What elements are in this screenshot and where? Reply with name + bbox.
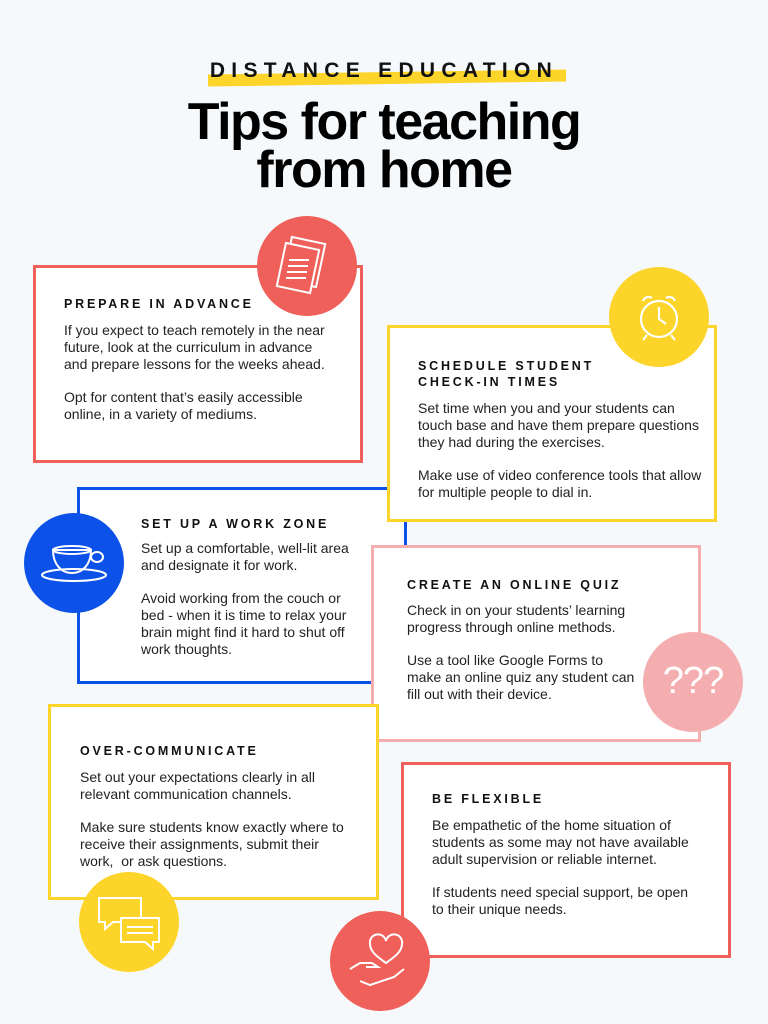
panel: over-communicate: OVER-COMMUNICATE (80, 744, 259, 758)
panel: online quiz: Use a tool like Google Forms to make an online quiz any student can fill out with their device. (407, 652, 634, 702)
panel: be flexible: Be empathetic of the home situation of students as some may not have available adult supervision or reliable internet. (432, 817, 689, 867)
panel: online quiz (371, 545, 701, 742)
icon: question marks: ??? (663, 660, 723, 702)
panel: over-communicate (48, 704, 379, 900)
title: Tips for teaching (188, 93, 580, 151)
panel: work zone: Set up a comfortable, well-lit area and designate it for work. (141, 540, 349, 573)
title: from home (256, 141, 512, 199)
kicker with highlight: DISTANCE EDUCATION (210, 59, 558, 82)
panel: work zone (77, 487, 407, 684)
panel: schedule check-ins (387, 325, 717, 522)
panel: be flexible (401, 762, 731, 958)
icon: question marks (643, 632, 743, 732)
panel: prepare in advance (33, 265, 363, 463)
panel: schedule check-ins: Set time when you and your students can touch base and have them prepare questions they had during the exercises. (418, 400, 699, 450)
icon: documents (257, 216, 357, 316)
header (188, 59, 580, 199)
icon: heart in hand (330, 911, 430, 1011)
icon: chat bubbles (79, 872, 179, 972)
panel: prepare in advance: Opt for content that’s easily accessible online, in a variety of mediums. (64, 389, 303, 422)
icon: alarm clock (609, 267, 709, 367)
panel: be flexible: If students need special support, be open to their unique needs. (432, 884, 688, 917)
panel: over-communicate: Make sure students know exactly where to receive their assignments, submit their work, or ask questions. (80, 819, 344, 869)
panel: over-communicate: Set out your expectations clearly in all relevant communication channels. (80, 769, 315, 802)
panel: be flexible: BE FLEXIBLE (432, 792, 544, 806)
panel: schedule check-ins: CHECK-IN TIMES (418, 375, 560, 389)
panel: online quiz: Check in on your students’ learning progress through online methods. (407, 602, 625, 635)
panel: prepare in advance: PREPARE IN ADVANCE (64, 297, 254, 311)
icon: teacup (24, 513, 124, 613)
panel: work zone: Avoid working from the couch or bed - when it is time to relax your brain might find it hard to shut off work thoughts. (141, 590, 346, 657)
panel: prepare in advance: If you expect to teach remotely in the near future, look at the curriculum in advance and prepare lessons for the weeks ahead. (64, 322, 325, 372)
panel: schedule check-ins: Make use of video conference tools that allow for multiple people to dial in. (418, 467, 701, 500)
panel: schedule check-ins: SCHEDULE STUDENT (418, 359, 594, 373)
panel: online quiz: CREATE AN ONLINE QUIZ (407, 578, 621, 592)
title (188, 93, 580, 199)
panel: work zone: SET UP A WORK ZONE (141, 517, 329, 531)
